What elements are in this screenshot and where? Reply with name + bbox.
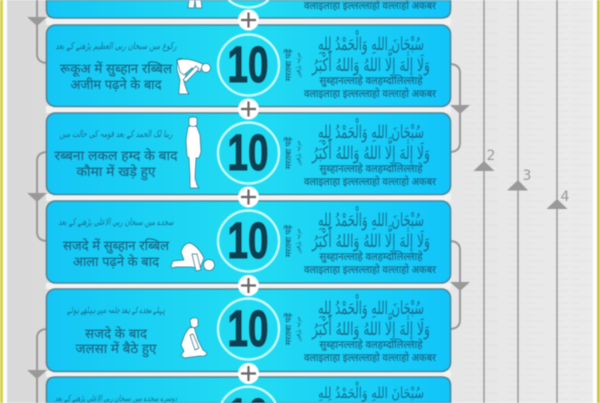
card 2: ruku: [46, 25, 450, 106]
hindi caption: [76, 326, 157, 358]
figure: standing: [186, 117, 201, 188]
vertical repeat label: مرتبہ پڑھیں: [294, 140, 302, 166]
hindi dhikr: सुब्हानल्लाहे वलहम्दोलिल्लाहे: [320, 162, 423, 175]
arabic dhikr: سُبْحَانَ اللهِ وَالْحَمْدُ لِلهِ: [318, 118, 424, 143]
vertical repeat label: مرتبہ پڑھیں: [294, 316, 302, 342]
hindi caption: अजीम पढ़ने के बाद: [70, 77, 163, 92]
arabic dhikr: وَلَا إِلٰهَ إِلَّا اللهُ وَاللهُ أَكْبَرُ: [311, 136, 430, 167]
figure: prostrating: [171, 243, 214, 271]
card 1: standing (cropped): [46, 0, 450, 18]
hindi caption: कौमा में खड़े हुए: [76, 164, 156, 181]
plus badge 3: [238, 186, 259, 208]
hindi dhikr: [304, 338, 437, 364]
count ring: [228, 0, 268, 7]
count ten: 10: [228, 124, 268, 181]
right connector arrow 1: [450, 64, 470, 152]
hindi dhikr: [304, 74, 437, 100]
plus badge 4: [238, 275, 259, 296]
hindi caption: [60, 61, 172, 92]
arabic dhikr: سُبْحَانَ اللهِ وَالْحَمْدُ لِلهِ: [318, 382, 424, 402]
arabic dhikr: وَلَا إِلٰهَ إِلَّا اللهُ وَاللهُ أَكْبَرُ: [311, 224, 430, 255]
vertical repeat label: [283, 224, 302, 257]
hindi dhikr: सुब्हानल्लाहे वलहम्दोलिल्लाहे: [320, 338, 423, 351]
hindi caption: [63, 238, 169, 269]
vertical repeat label: मरतबा पढ़ें: [283, 224, 293, 257]
arabic dhikr: سُبْحَانَ اللهِ وَالْحَمْدُ لِلهِ: [318, 206, 424, 231]
hindi caption: [54, 148, 179, 181]
hindi caption: जलसा में बैठे हुए: [76, 341, 157, 358]
count ten: 10: [228, 212, 268, 269]
arabic dhikr: [311, 206, 430, 255]
hindi caption: रूकूअ में सुब्हान रब्बिल: [60, 61, 172, 77]
left connector arrow 2: [27, 152, 47, 241]
figure: sitting: [181, 318, 207, 358]
right connector arrow 2: [450, 241, 470, 329]
arabic dhikr: سُبْحَانَ اللهِ وَالْحَمْدُ لِلهِ: [318, 30, 424, 55]
long arrow 2: 2: [487, 148, 495, 164]
card 5: jalsa: [46, 289, 450, 372]
left connector arrow 3: [27, 329, 47, 403]
arabic dhikr: سُبْحَانَ اللهِ وَالْحَمْدُ لِلهِ: [318, 294, 424, 319]
long arrow 3: [507, 0, 531, 403]
dhikr transliteration: वलाइलाहा इल्लल्लाहो वल्लाहो अकबर: [304, 0, 437, 12]
hindi dhikr: सुब्हानल्लाहे वलहम्दोलिल्लाहे: [320, 74, 423, 87]
arabic dhikr: [311, 30, 430, 79]
figure: standing legs: [188, 0, 202, 8]
card 6: second sajda (cropped): [46, 377, 450, 403]
count ten: 10: [228, 36, 268, 93]
vertical repeat label: [283, 48, 302, 81]
urdu caption: پہلے سجدے کے بعد جلسہ میں بیٹھے ہوئے: [67, 305, 165, 316]
count ten: 10: [228, 300, 268, 357]
card 4: sajda: [46, 201, 450, 283]
hindi dhikr: वलाइलाहा इल्लल्लाहो वल्लाहो अकबर: [304, 175, 437, 188]
hindi caption: रब्बना लकल हम्द के बाद: [54, 148, 179, 163]
hindi caption: सजदे के बाद: [85, 326, 148, 341]
hindi dhikr: वलाइलाहा इल्लल्लाहो वल्लाहो अकबर: [304, 263, 437, 276]
vertical repeat label: مرتبہ پڑھیں: [294, 228, 302, 254]
card 3: qauma: [46, 113, 450, 194]
left connector arrow 1: [27, 0, 47, 63]
vertical repeat label: مرتبہ پڑھیں: [294, 52, 302, 78]
urdu caption: ربنا لک الحمد کے بعد قومہ کی حالت میں: [60, 129, 173, 140]
count ten: [220, 384, 277, 403]
plus badge 1: [238, 10, 259, 30]
hindi dhikr: सुब्हानल्लाहे वलहम्दोलिल्लाहे: [320, 250, 423, 263]
hindi dhikr: वलाइलाहा इल्लल्लाहो वल्लाहो अकबर: [304, 351, 437, 364]
vertical repeat label: मरतबा पढ़ें: [283, 48, 293, 81]
hindi caption: आला पढ़ने के बाद: [73, 254, 160, 269]
plus badge 5: [238, 363, 259, 384]
arabic dhikr: وَلَا إِلٰهَ إِلَّا اللهُ وَاللهُ أَكْبَرُ: [311, 48, 430, 79]
arabic dhikr: [311, 294, 430, 343]
long arrow 4: 4: [561, 189, 570, 205]
hindi caption: सजदे में सुब्हान रब्बिल: [63, 238, 169, 254]
long arrow 4: [546, 0, 570, 403]
plus badge 2: [238, 98, 259, 120]
arabic dhikr: وَلَا إِلٰهَ إِلَّا اللهُ وَاللهُ أَكْبَرُ: [311, 312, 430, 343]
hindi dhikr: [304, 162, 437, 188]
hindi dhikr: वलाइलाहा इल्लल्लाहो वल्लाहो अकबर: [304, 87, 437, 100]
long arrow 3: 3: [523, 168, 531, 184]
vertical repeat label: [283, 136, 302, 169]
urdu caption: رکوع میں سبحان ربی العظیم پڑھنے کے بعد: [56, 41, 177, 52]
arabic dhikr: [311, 118, 430, 167]
hindi dhikr: [304, 250, 437, 276]
figure: bowing: [177, 58, 210, 94]
urdu caption: سجدے میں سبحان ربی الاعلی پڑھنے کے بعد: [58, 217, 174, 228]
vertical repeat label: मरतबा पढ़ें: [283, 136, 293, 169]
vertical repeat label: मरतबा पढ़ें: [283, 312, 293, 345]
long arrow 2: [474, 0, 495, 403]
vertical repeat label: [283, 312, 302, 345]
